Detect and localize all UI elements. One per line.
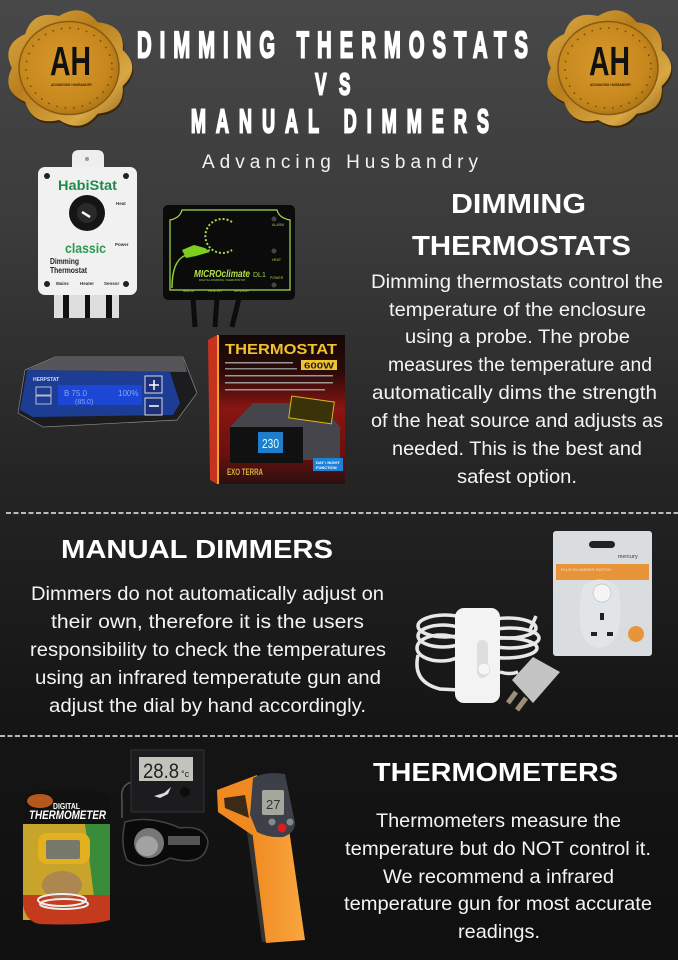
text: dimming thermostats description: needed. This is the best and [392,438,642,460]
icon: right gold seal: AH [589,38,630,84]
product: Exo Terra Thermostat 600W box: 230 [262,436,279,451]
icon: left gold seal [8,10,133,128]
product: Exo Terra Thermostat 600W box: 600W [304,362,335,370]
product: white inline slide dimmer with cord [417,608,560,710]
product: MICROclimate DL1 thermostat: HEATER [208,289,222,293]
title [137,25,528,140]
subtitle: Advancing Husbandry [202,152,478,173]
text: thermometers description: We recommend a infrared [383,866,614,888]
product: Exo Terra Thermostat 600W box: FUNCTION [316,465,337,470]
product: Exo Terra Thermostat 600W box [208,335,345,484]
product: MICROclimate DL1 thermostat: MAINS [183,289,195,293]
text: thermometers description [344,810,652,943]
product: Zoo Med digital thermometer card: THERMOMETER [29,810,107,822]
product: orange infrared temperature gun: 27 [266,797,280,812]
product: Exo Terra Thermostat 600W box: EXO TERRA [227,467,263,477]
product: blue digital thermostat [18,357,197,427]
product: HabiStat classic thermostat: Mains [56,281,69,286]
product: HabiStat classic thermostat: Dimming [50,257,79,266]
text: dimming thermostats description: using a probe. The probe [405,326,630,348]
text: manual dimmers description: their own, therefore it is the users [51,611,364,633]
product: Mercury plug-in dimmer pack: PLUG IN DIMMER SWITCH [561,567,611,572]
text: manual dimmers description: adjust the dial by hand accordingly. [49,695,366,717]
product: MICROclimate DL1 thermostat: DL1 [253,272,266,279]
product: blue digital thermostat: HERPSTAT [33,377,59,383]
product: MICROclimate DL1 thermostat [163,205,295,327]
product: MICROclimate DL1 thermostat: SENSOR [234,289,249,293]
section heading: dimming thermostats: THERMOSTATS [412,230,631,261]
product: Exo Terra Thermostat 600W box: DAY / NIGHT [316,460,340,465]
section heading: thermometers: THERMOMETERS [373,757,618,787]
text: dimming thermostats description: measures the temperature and [388,354,652,376]
title: MANUAL DIMMERS [191,103,489,140]
product: digital aquarium thermometer: 28.8 [143,760,179,783]
product: Exo Terra Thermostat 600W box: THERMOSTAT [225,341,337,358]
product: HabiStat classic thermostat: Thermostat [50,266,87,275]
text: thermometers description: Thermometers measure the [376,810,621,832]
product: Mercury plug-in dimmer pack: mercury [618,554,638,560]
icon: right gold seal: ADVANCING HUSBANDRY [590,82,631,87]
section heading: manual dimmers: MANUAL DIMMERS [61,534,333,564]
icon: right gold seal [547,10,672,128]
title: VS [315,67,350,102]
product: blue digital thermostat: 100% [118,389,138,398]
icon: left gold seal: ADVANCING HUSBANDRY [51,82,92,87]
text: thermometers description: temperature but do NOT control it. [345,838,651,860]
text: manual dimmers description [30,583,386,717]
product: blue digital thermostat: (85.0) [75,399,93,406]
product: HabiStat classic thermostat: HabiStat [58,177,117,193]
product: HabiStat classic thermostat: Sensor [104,281,120,286]
product: MICROclimate DL1 thermostat: MICROclimate [194,269,250,280]
product: digital aquarium thermometer: °c [181,769,190,779]
product: digital aquarium thermometer [122,750,208,866]
product: Zoo Med digital thermometer card: DIGITAL [53,801,80,811]
text: manual dimmers description: Dimmers do not automatically adjust on [31,583,384,605]
product: HabiStat classic thermostat: classic [65,240,106,256]
text: dimming thermostats description: automatically dims the strength [372,382,657,404]
icon: left gold seal: AH [50,38,91,84]
section heading: dimming thermostats: DIMMING [451,188,586,219]
product: MICROclimate DL1 thermostat: POWER [270,276,284,280]
text: dimming thermostats description: safest option. [457,466,577,488]
text: dimming thermostats description [371,271,663,488]
product: MICROclimate DL1 thermostat: DIGITAL DIMMING THERMOSTAT [199,278,246,282]
product: MICROclimate DL1 thermostat: ALARM [272,223,284,227]
product: HabiStat classic thermostat [38,150,137,318]
product: HabiStat classic thermostat: Heat [116,201,126,206]
text: dimming thermostats description: of the heat source and adjusts as [371,410,663,432]
text: manual dimmers description: using an infrared temperatute gun and [35,667,381,689]
product: HabiStat classic thermostat: Power [115,242,129,247]
product: orange infrared temperature gun [217,773,305,943]
product: blue digital thermostat: B 75.0 [64,389,88,398]
product: MICROclimate DL1 thermostat: HEAT [272,258,282,262]
text: dimming thermostats description: Dimming thermostats control the [371,271,663,293]
text: thermometers description: temperature gun for most accurate [344,893,652,915]
product: HabiStat classic thermostat: Heater [80,281,94,286]
product: Mercury plug-in dimmer pack [553,531,652,656]
product: Zoo Med digital thermometer card [23,788,110,925]
text: dimming thermostats description: temperature of the enclosure [389,299,646,321]
text: thermometers description: readings. [458,921,540,943]
title: DIMMING THERMOSTATS [137,25,528,66]
text: manual dimmers description: responsibility to check the temperatures [30,639,386,661]
section heading: dimming thermostats [412,188,631,261]
